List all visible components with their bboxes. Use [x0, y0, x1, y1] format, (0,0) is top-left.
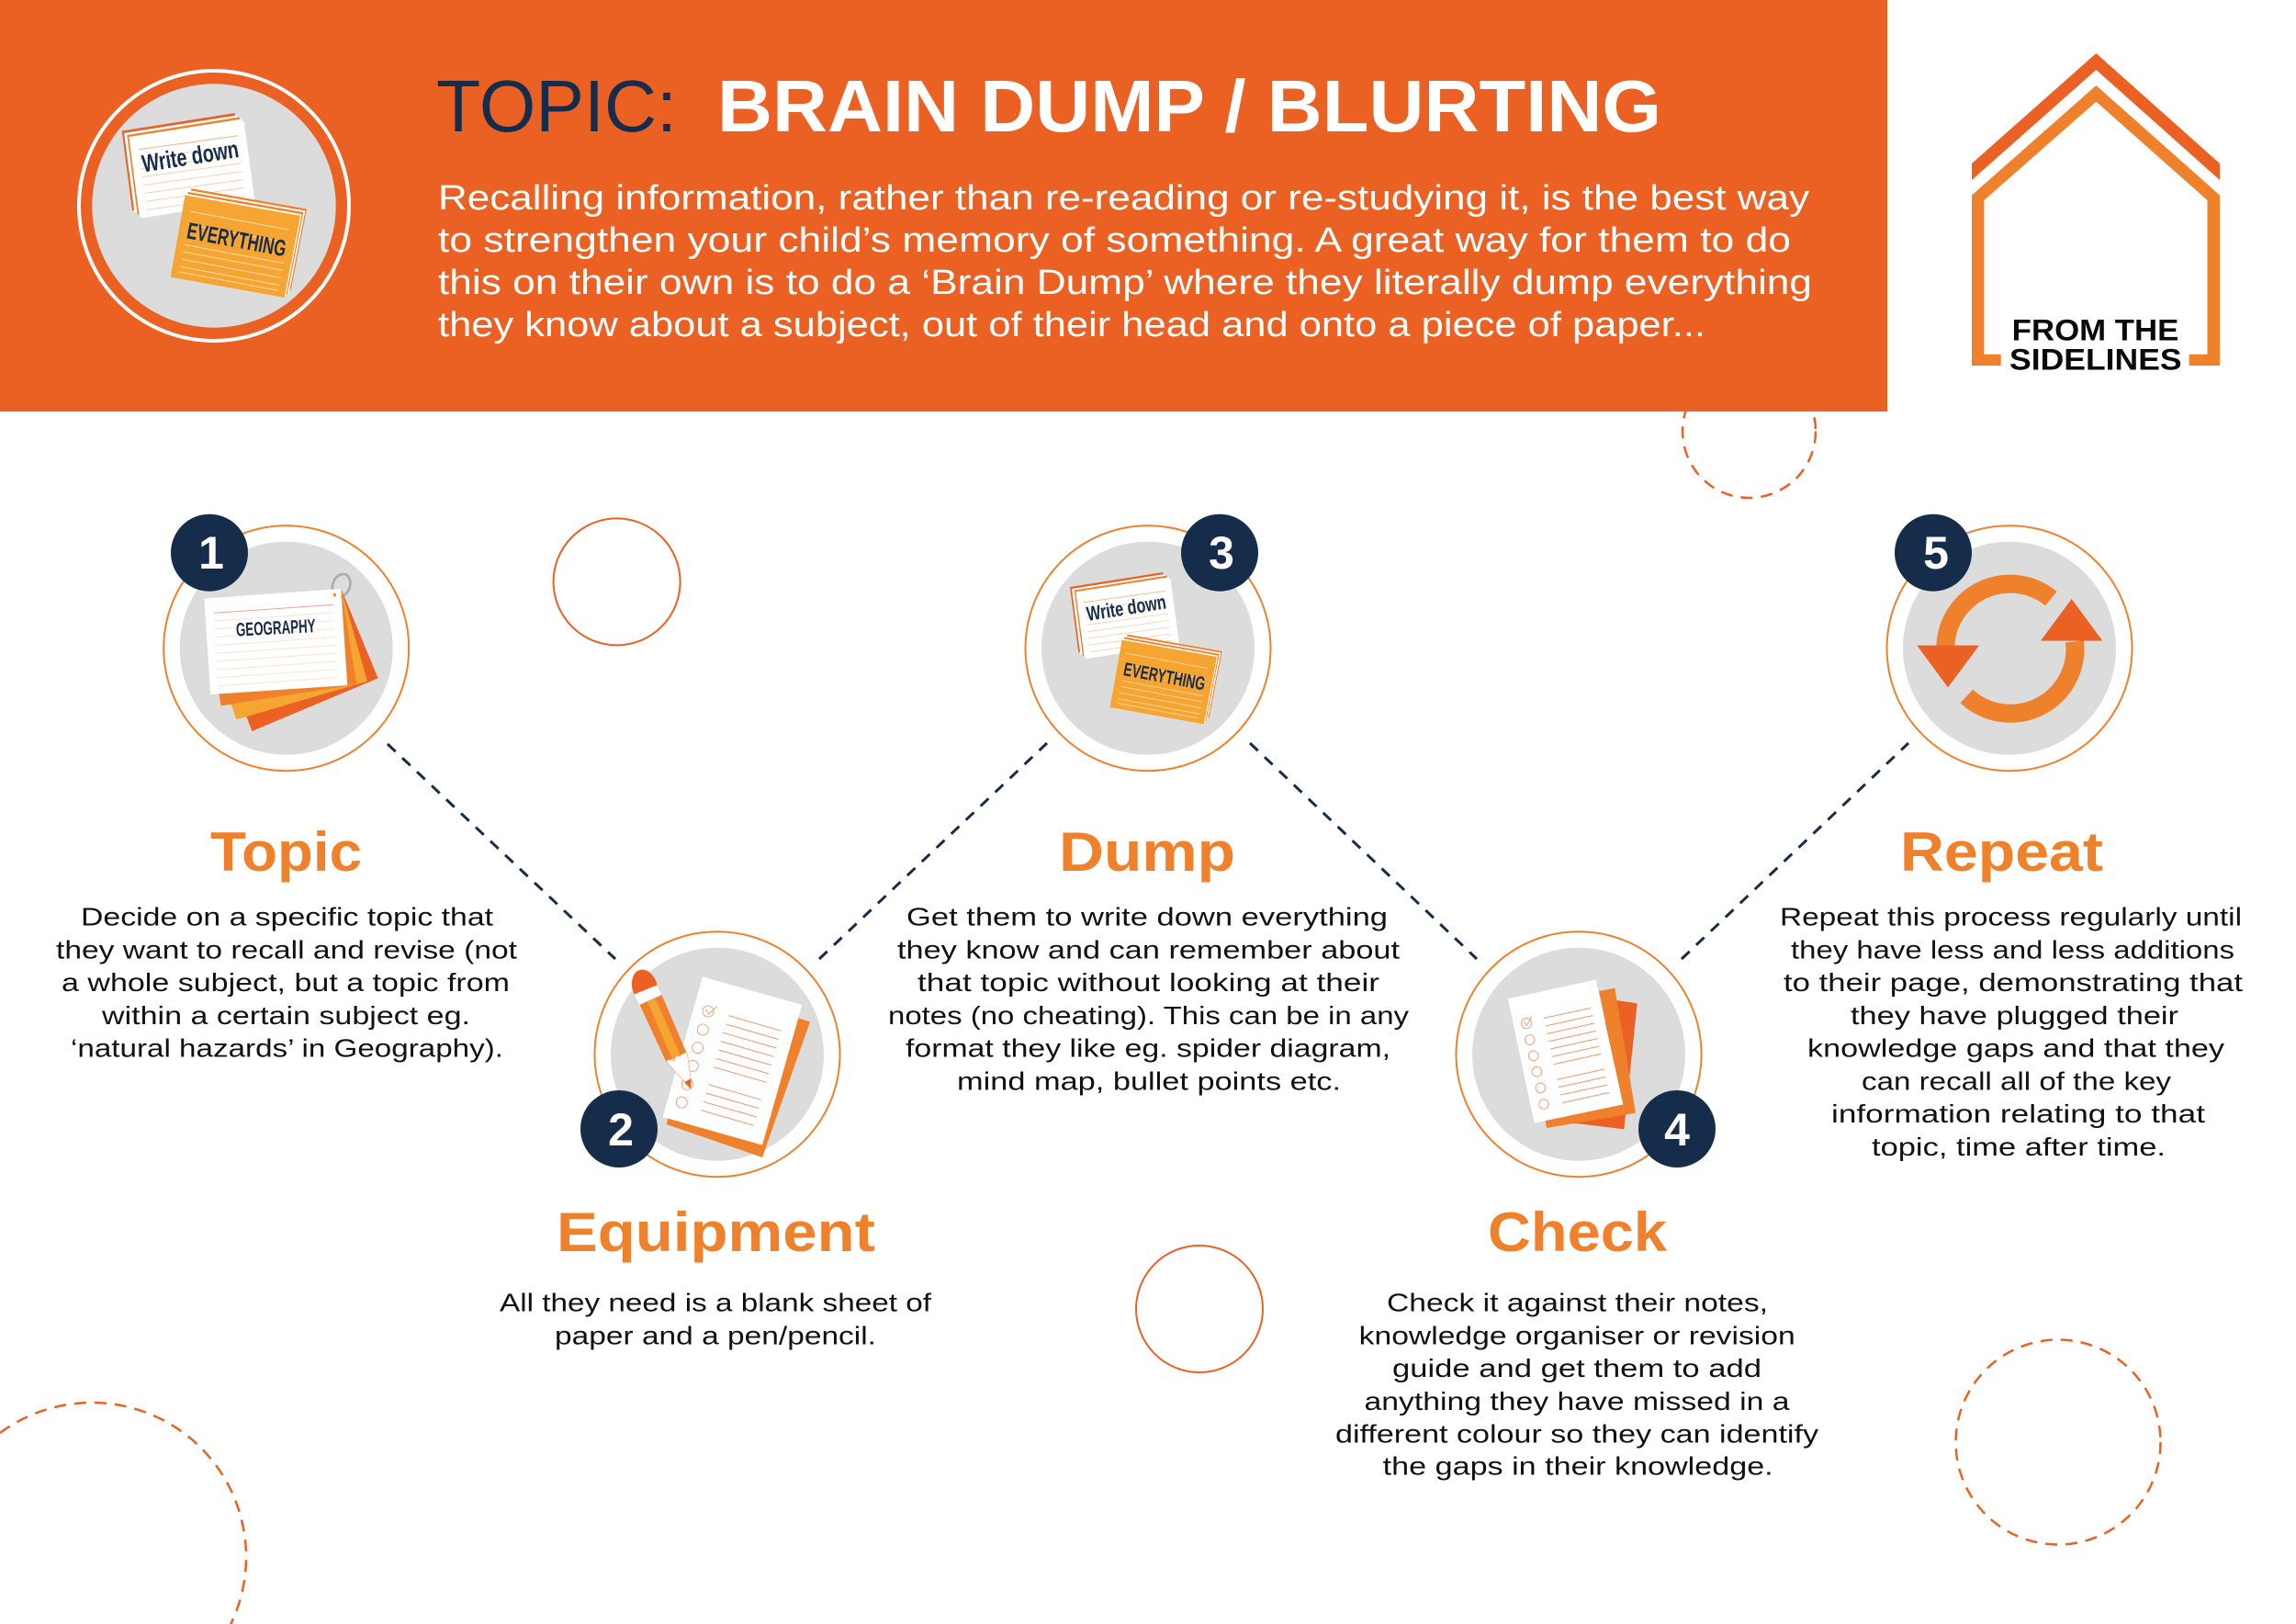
icon: flash cards on ring: GEOGRAPHY: [235, 615, 316, 641]
icon: pencil and checklist: [595, 931, 839, 1177]
decorative dashed circle: bottom right: [1956, 1339, 2160, 1545]
header banner: [0, 0, 1887, 412]
text: Equipment description: All they need is a blank sheet of: [500, 1289, 931, 1317]
text: Topic description: within a certain subject eg.: [101, 1001, 470, 1030]
text: Repeat description: to their page, demonstrating that: [1784, 968, 2243, 997]
text: Repeat description: [1780, 903, 2243, 1161]
text: Check description: different colour so they can identify: [1335, 1420, 1818, 1449]
number badge 1: 1: [198, 527, 224, 579]
logo: From the Sidelines: SIDELINES: [2009, 344, 2182, 377]
icon: flash cards on ring: [163, 525, 409, 771]
text: Check description: guide and get them to add: [1392, 1354, 1761, 1382]
banner background: [0, 0, 1887, 412]
text: Repeat description: they have less and less additions: [1791, 935, 2234, 964]
number badge 4: [1638, 1090, 1716, 1167]
decorative dashed arc: bottom left: [0, 1403, 246, 1624]
icon: write down everything cards: Write down: [1085, 591, 1167, 626]
title: BRAIN DUMP / BLURTING: [717, 65, 1661, 147]
heading: Dump: Dump: [1059, 821, 1235, 883]
step 4: Check: [1335, 931, 1818, 1481]
step 2: Equipment: [500, 931, 931, 1349]
text: Topic description: ‘natural hazards’ in Geography).: [71, 1034, 503, 1063]
number badge 1: [171, 514, 248, 592]
dashed connector lines: [388, 743, 1908, 959]
text: Check description: the gaps in their knowledge.: [1383, 1452, 1773, 1481]
text: Repeat description: can recall all of the key: [1862, 1066, 2171, 1095]
decorative circle: lower: [1136, 1246, 1263, 1372]
icon: checked papers: [1457, 931, 1701, 1177]
icon: header cards: [79, 71, 349, 341]
text: Dump description: mind map, bullet points etc.: [957, 1066, 1341, 1095]
decorative dashed circle: behind banner: [1683, 365, 1816, 498]
heading: Check: Check: [1488, 1201, 1668, 1263]
step 1: Topic: [56, 514, 517, 1063]
text: Repeat description: knowledge gaps and that they: [1807, 1034, 2224, 1063]
text: Dump description: they know and can remember about: [897, 935, 1400, 964]
heading: Equipment: Equipment: [557, 1201, 875, 1263]
icon: write down everything cards: [1025, 525, 1271, 771]
text: Repeat description: they have plugged their: [1851, 1001, 2178, 1030]
intro paragraph: this on their own is to do a ‘Brain Dump’ where they literally dump everything: [438, 264, 1812, 302]
text: Dump description: format they like eg. spider diagram,: [906, 1034, 1390, 1063]
icon: repeat arrows: [1886, 525, 2133, 771]
heading: Topic: Topic: [210, 821, 362, 883]
text: Equipment description: paper and a pen/pencil.: [555, 1321, 876, 1349]
text: Equipment description: [500, 1289, 931, 1349]
text: Check description: [1335, 1289, 1818, 1481]
text: Check description: Check it against their notes,: [1387, 1289, 1768, 1317]
number badge 3: [1181, 514, 1258, 592]
number badge 5: [1895, 514, 1972, 592]
text: Dump description: that topic without looking at their: [917, 968, 1379, 997]
text: Topic description: a whole subject, but a topic from: [62, 968, 510, 997]
text: Repeat description: information relating to that: [1831, 1100, 2205, 1128]
text: Repeat description: Repeat this process regularly until: [1780, 903, 2242, 931]
icon: header cards: EVERYTHING: [185, 219, 288, 262]
text: Topic description: they want to recall and revise (not: [56, 935, 517, 964]
intro paragraph: they know about a subject, out of their head and onto a piece of paper...: [438, 306, 1705, 344]
text: Check description: anything they have missed in a: [1365, 1387, 1790, 1415]
logo: From the Sidelines: FROM THE: [2012, 313, 2178, 346]
number badge 5: 5: [1923, 527, 1949, 579]
text: Topic description: Decide on a specific topic that: [81, 903, 493, 931]
intro paragraph: to strengthen your child’s memory of something. A great way for them to do: [438, 221, 1791, 260]
intro paragraph: [438, 179, 1812, 344]
intro paragraph: Recalling information, rather than re-reading or re-studying it, is the best way: [438, 179, 1809, 218]
text: Topic description: [56, 903, 517, 1063]
number badge 2: [580, 1090, 658, 1167]
icon: write down everything cards: EVERYTHING: [1121, 659, 1207, 694]
text: Dump description: Get them to write down everything: [906, 903, 1388, 931]
decorative circle: upper: [554, 518, 681, 645]
logo: From the Sidelines: [1972, 53, 2220, 377]
text: Repeat description: topic, time after time.: [1872, 1133, 2166, 1161]
heading: Repeat: Repeat: [1900, 821, 2103, 883]
step 5: Repeat: [1780, 514, 2243, 1161]
number badge 2: 2: [608, 1104, 634, 1156]
number badge 4: 4: [1664, 1104, 1690, 1156]
step 3: Dump: [888, 514, 1409, 1095]
text: Dump description: notes (no cheating). This can be in any: [888, 1001, 1409, 1030]
number badge 3: 3: [1209, 527, 1234, 579]
text: Check description: knowledge organiser or revision: [1359, 1321, 1795, 1349]
text: Dump description: [888, 903, 1409, 1095]
title: TOPIC:: [436, 65, 677, 147]
icon: header cards: Write down: [140, 135, 241, 177]
